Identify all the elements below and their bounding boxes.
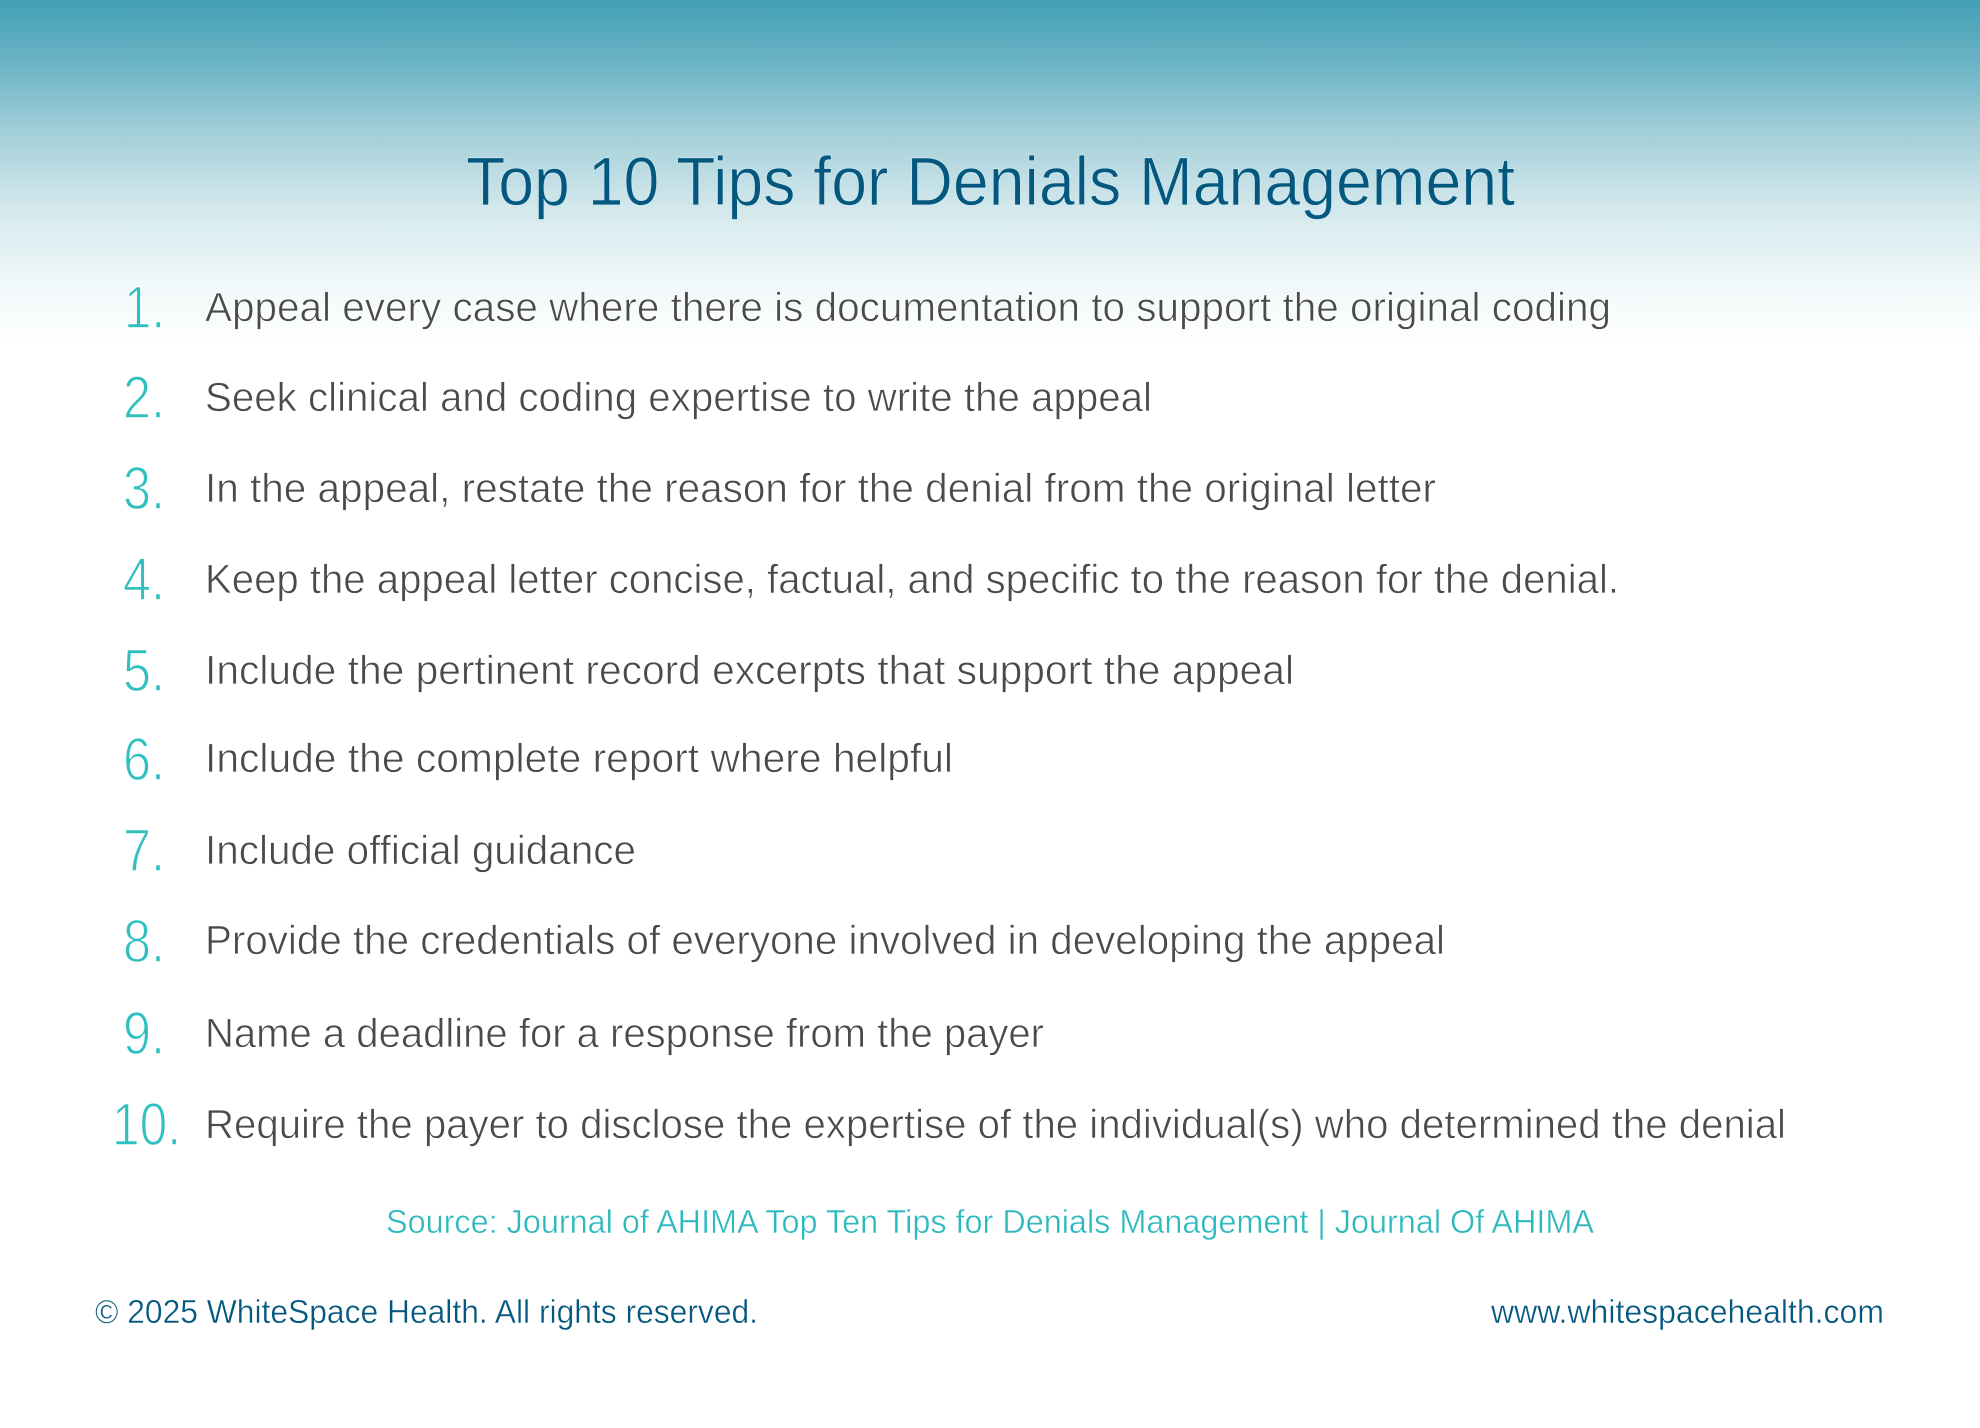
tip 8: Provide the credentials of everyone involved in developing the appeal bbox=[205, 917, 1445, 963]
tip 6: 6. bbox=[123, 726, 165, 793]
tip 1: 1. bbox=[124, 274, 165, 341]
copyright: © 2025 WhiteSpace Health. All rights reserved. bbox=[95, 1293, 758, 1330]
tip 9 bbox=[123, 1000, 1044, 1067]
tip 1 bbox=[124, 274, 1611, 341]
tip 5: 5. bbox=[123, 637, 165, 704]
tip 4 bbox=[123, 546, 1619, 613]
tip 10: Require the payer to disclose the expertise of the individual(s) who determined the denial bbox=[205, 1101, 1786, 1147]
tip 8: 8. bbox=[123, 908, 165, 975]
tip 10 bbox=[112, 1091, 1786, 1158]
tip 6 bbox=[123, 726, 953, 793]
title: Top 10 Tips for Denials Management bbox=[466, 143, 1515, 220]
tip 3 bbox=[123, 455, 1436, 522]
tip 1: Appeal every case where there is documentation to support the original coding bbox=[205, 284, 1611, 330]
tip 4: 4. bbox=[123, 546, 165, 613]
tip 10: 10. bbox=[112, 1091, 181, 1158]
tip 2: Seek clinical and coding expertise to write the appeal bbox=[205, 374, 1152, 420]
tip 5 bbox=[123, 637, 1294, 704]
tip 8 bbox=[123, 908, 1445, 975]
tip 2 bbox=[123, 364, 1152, 431]
tip 7: Include official guidance bbox=[205, 827, 636, 873]
website: www.whitespacehealth.com bbox=[1490, 1293, 1884, 1330]
tip 9: 9. bbox=[123, 1000, 165, 1067]
source line: Source: Journal of AHIMA Top Ten Tips for Denials Management | Journal Of AHIMA bbox=[386, 1203, 1594, 1240]
tip 3: 3. bbox=[123, 455, 165, 522]
tip 9: Name a deadline for a response from the payer bbox=[205, 1010, 1044, 1056]
tip 3: In the appeal, restate the reason for the denial from the original letter bbox=[205, 465, 1436, 511]
tips list bbox=[112, 274, 1786, 1158]
tip 7 bbox=[123, 817, 636, 884]
tip 4: Keep the appeal letter concise, factual, and specific to the reason for the denial. bbox=[205, 556, 1619, 602]
tip 5: Include the pertinent record excerpts that support the appeal bbox=[205, 647, 1294, 693]
tip 2: 2. bbox=[123, 364, 165, 431]
tip 6: Include the complete report where helpful bbox=[205, 735, 953, 781]
header gradient band bbox=[0, 0, 1980, 345]
tip 7: 7. bbox=[123, 817, 165, 884]
